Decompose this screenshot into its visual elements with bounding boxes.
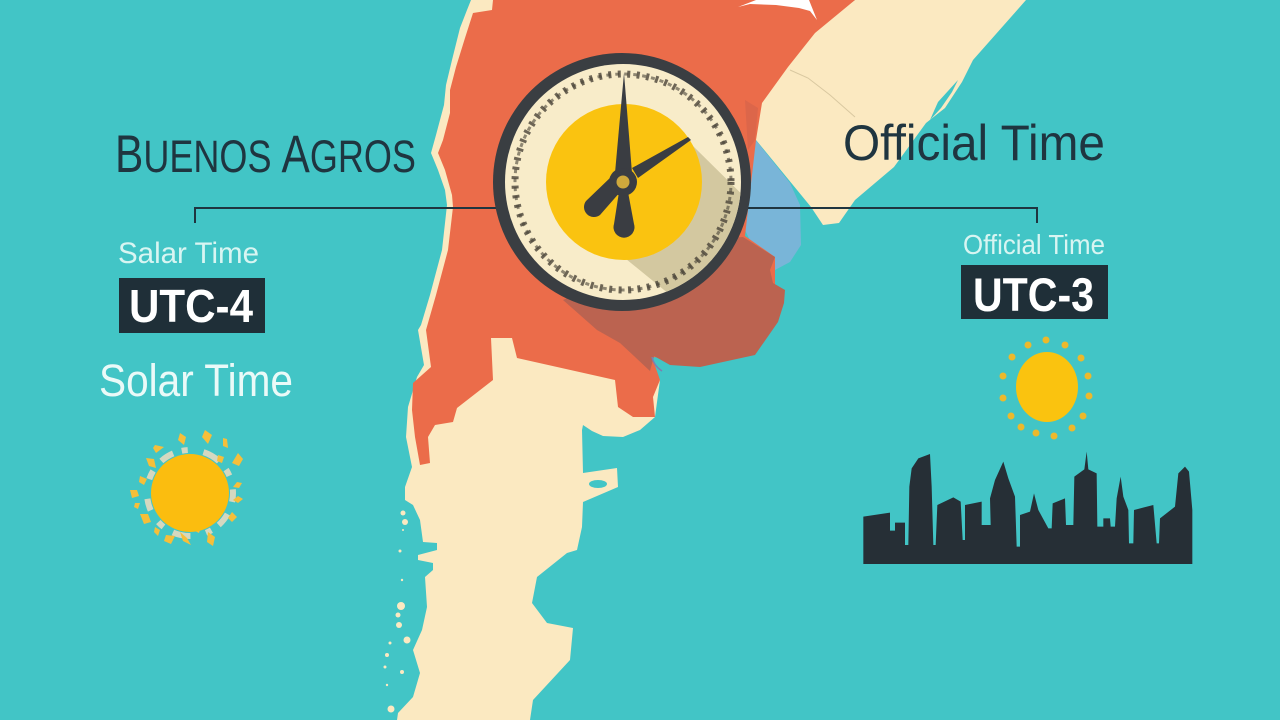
map of Argentina and neighbours xyxy=(384,0,1026,720)
darker clock shadow on orange xyxy=(563,237,785,371)
clock face xyxy=(505,64,741,300)
river plate blue water xyxy=(745,138,801,270)
land: cream southern region and coastal border xyxy=(397,0,660,720)
left tail of hour hand xyxy=(584,176,621,217)
land: cream north-eastern region xyxy=(740,0,1026,225)
lagoon inlet on east coast xyxy=(930,80,958,120)
right connector line xyxy=(748,208,1037,223)
clock hub xyxy=(609,168,637,196)
inland border line xyxy=(790,70,855,117)
icon: city skyline xyxy=(863,452,1192,564)
clock outer ring xyxy=(493,53,751,311)
sun body xyxy=(1016,352,1078,422)
label: Salar Time: Salar Time xyxy=(118,237,259,270)
icon: rough solar-time sun xyxy=(130,430,243,546)
label: Solar Time: Solar Time xyxy=(99,355,293,406)
white patch at top of map xyxy=(738,0,817,20)
southern lagoon xyxy=(589,480,607,488)
sun rays xyxy=(130,430,243,546)
badge: UTC-3: UTC-3 xyxy=(973,268,1094,321)
sun dots xyxy=(1000,336,1092,440)
icon: official-time sun xyxy=(1000,336,1092,440)
sun disc on clock face xyxy=(546,104,702,260)
sun body xyxy=(151,454,229,532)
small blue estuary mark xyxy=(652,357,662,371)
badge: UTC-4: UTC-4 xyxy=(129,280,253,332)
hand shadow on face xyxy=(628,146,740,292)
pale halo behind sun xyxy=(147,450,233,536)
minute hand xyxy=(614,73,633,190)
clock xyxy=(493,53,770,311)
south-western islands xyxy=(384,510,410,712)
small clock shadow upper right xyxy=(745,100,758,150)
clock hub centre xyxy=(616,176,630,188)
heading: Official Time: Official Time xyxy=(843,115,1105,171)
left connector line xyxy=(195,208,497,223)
hour hand xyxy=(632,137,691,178)
title: Buenos Agros: BUENOS AGROS xyxy=(115,125,416,184)
land: orange central region xyxy=(412,0,855,465)
lower tail of minute hand xyxy=(614,192,635,238)
label: Official Time small: Official Time xyxy=(963,229,1105,260)
dial markings xyxy=(515,74,731,290)
